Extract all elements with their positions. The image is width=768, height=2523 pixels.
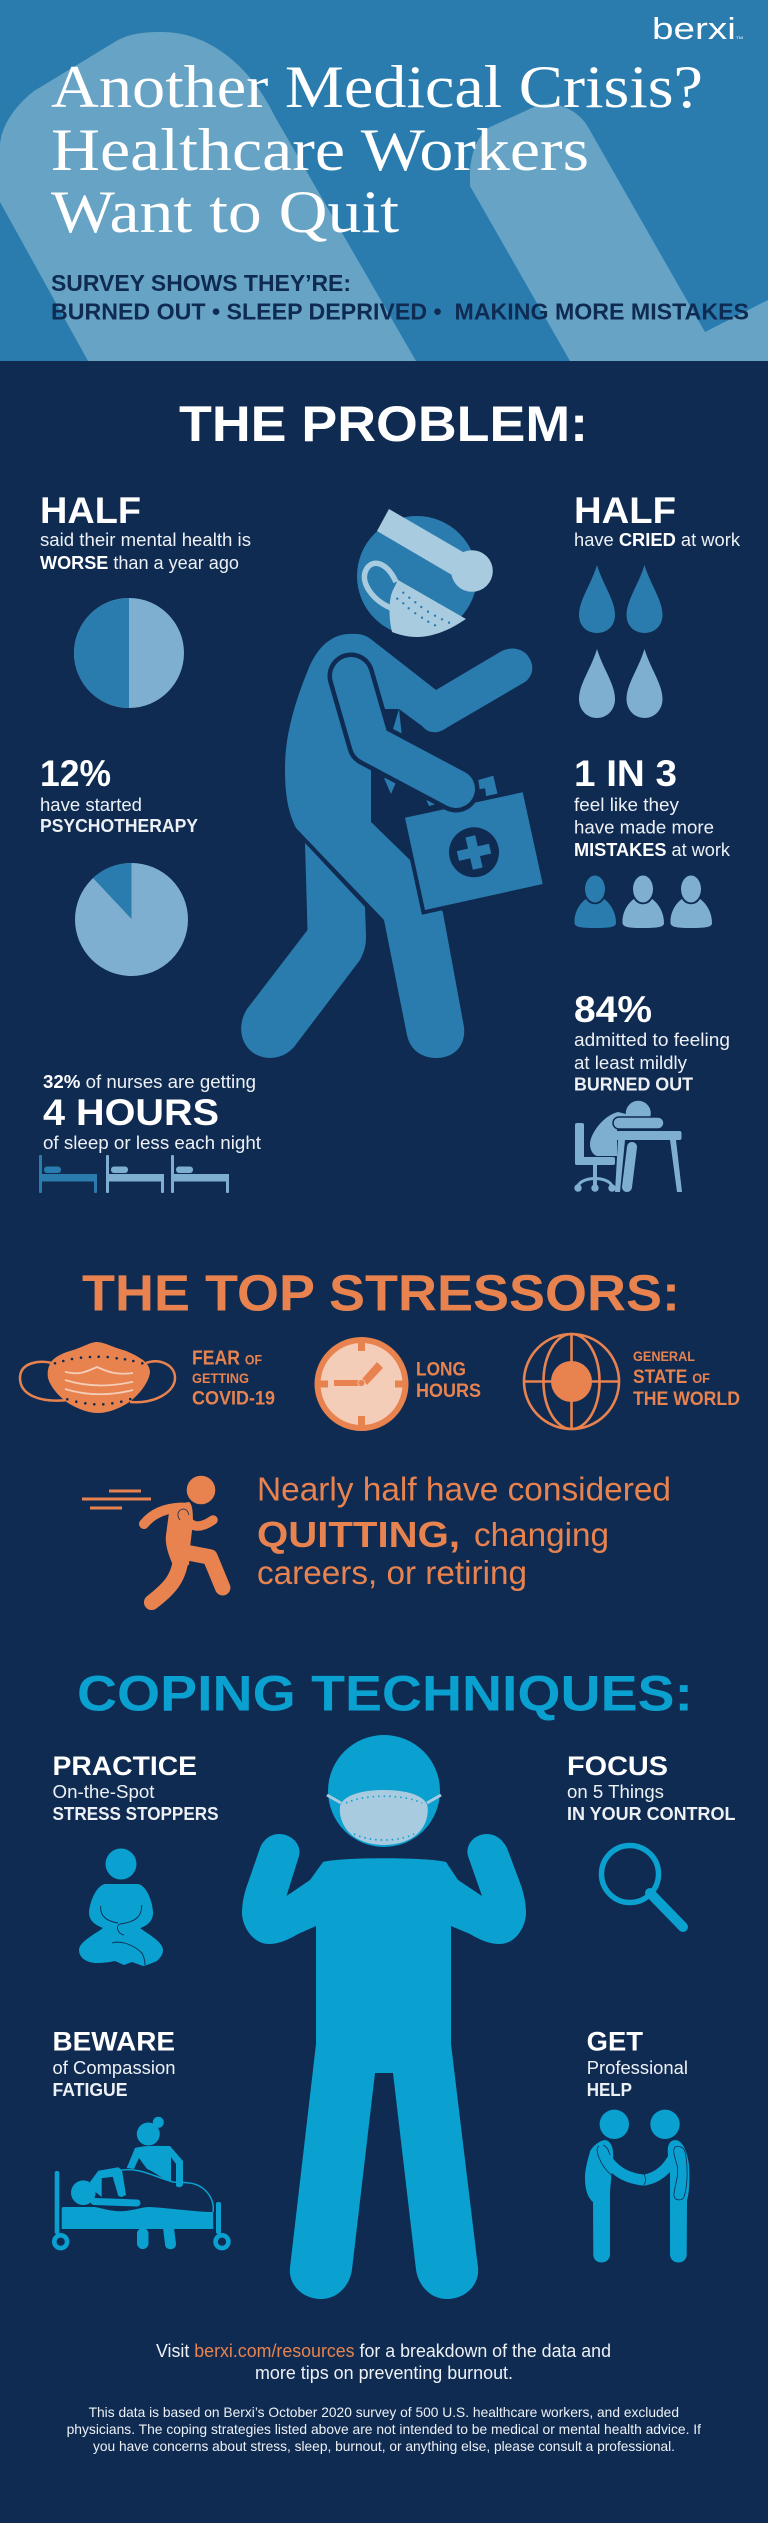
pie chart: 12% <box>75 863 188 976</box>
technique: practice stress stoppers: STRESS STOPPERS <box>52 1803 218 1824</box>
technique: practice stress stoppers <box>52 1751 218 1824</box>
stat: 12% psychotherapy: 12% <box>40 753 111 794</box>
stat: 32% of nurses 4 hours: 32% of nurses are getting <box>43 1071 256 1092</box>
stat: 12% psychotherapy: PSYCHOTHERAPY <box>40 815 199 836</box>
front arm <box>351 676 456 789</box>
title: Healthcare Workers <box>51 117 589 183</box>
icon: nurse with patient in bed <box>54 2117 228 2249</box>
technique: beware of compassion fatigue <box>52 2026 176 2100</box>
panel: header banner <box>0 0 768 361</box>
logo: berxi: berxi <box>652 11 719 46</box>
technique: get professional help <box>587 2026 688 2100</box>
stat: half mental health worse: HALF <box>40 490 141 531</box>
label: LONG <box>416 1358 466 1380</box>
stat: 1 in 3 mistakes <box>574 753 731 860</box>
label: COVID-19 <box>192 1388 275 1410</box>
stressor: long hours <box>318 1340 481 1428</box>
heading: the top stressors: THE TOP STRESSORS: <box>82 1264 680 1322</box>
icon: three people <box>574 876 712 928</box>
stat: 84% burned out <box>574 989 730 1094</box>
stat: half mental health worse <box>40 490 251 573</box>
technique: practice stress stoppers: PRACTICE <box>52 1751 197 1781</box>
technique: beware of compassion fatigue: of Compassion <box>52 2057 176 2078</box>
heading: coping techniques: COPING TECHNIQUES: <box>77 1666 693 1722</box>
head with headband and mask <box>357 509 493 637</box>
illustration: burned out doctor with medical bag <box>241 509 543 1058</box>
icon: beds <box>39 1155 229 1193</box>
stat: 1 in 3 mistakes: feel like they <box>574 794 680 815</box>
stat: 12% psychotherapy <box>40 753 199 836</box>
stat: 84% burned out: at least mildly <box>574 1052 688 1073</box>
text block: call to visit resources: more tips on preventing burnout. <box>255 2363 513 2383</box>
stat: half have cried <box>574 490 741 550</box>
technique: beware of compassion fatigue: BEWARE <box>52 2026 175 2056</box>
stat: 84% burned out: BURNED OUT <box>574 1074 694 1094</box>
technique: practice stress stoppers: On-the-Spot <box>52 1781 154 1802</box>
subtitle <box>51 270 749 324</box>
stat: half mental health worse: said their mental health is <box>40 529 251 550</box>
label: HOURS <box>416 1380 481 1402</box>
technique: focus on what you control: FOCUS <box>567 1751 668 1781</box>
technique: focus on what you control: IN YOUR CONTROL <box>567 1803 736 1824</box>
technique: beware of compassion fatigue: FATIGUE <box>52 2079 128 2100</box>
title: Want to Quit <box>51 179 399 245</box>
stressor: general state of the world <box>524 1334 740 1429</box>
technique: get professional help: HELP <box>587 2079 632 2100</box>
text block: disclaimer <box>67 2405 701 2454</box>
heading: the problem: THE PROBLEM: <box>179 396 588 452</box>
stat: 32% of nurses 4 hours: 4 HOURS <box>43 1092 219 1133</box>
callout: quitting <box>257 1470 671 1591</box>
text block: call to visit resources: Visit berxi.com/resources for a breakdown of the data and <box>156 2341 611 2361</box>
torso and front leg <box>285 634 464 1058</box>
callout: quitting: careers, or retiring <box>257 1554 527 1591</box>
stat: half mental health worse: WORSE than a year ago <box>40 552 239 573</box>
illustration: masked healthcare worker flexing <box>242 1735 526 2299</box>
stat: 1 in 3 mistakes: 1 IN 3 <box>574 753 677 794</box>
back leg <box>241 843 366 1058</box>
icon: face mask <box>20 1342 175 1413</box>
technique: focus on what you control <box>567 1751 736 1824</box>
label: FEAR OF <box>192 1348 262 1370</box>
text block: disclaimer: This data is based on Berxi’s October 2020 survey of 500 U.S. healthcare workers, and excluded <box>89 2405 679 2420</box>
stressor: fear of covid <box>20 1342 275 1413</box>
label: STATE OF <box>633 1367 710 1388</box>
icon: clock <box>318 1340 406 1428</box>
logo: berxi: TM <box>736 35 743 40</box>
stat: half have cried: HALF <box>574 490 676 531</box>
label: GENERAL <box>633 1349 695 1364</box>
label: THE WORLD <box>633 1389 740 1410</box>
icon: two people shaking hands <box>585 2110 689 2262</box>
title: Another Medical Crisis? <box>51 54 703 120</box>
label <box>416 1358 481 1402</box>
icon: globe <box>524 1334 619 1429</box>
stat: half have cried: have CRIED at work <box>574 529 741 550</box>
subtitle: SURVEY SHOWS THEY’RE: <box>51 270 351 296</box>
stat: 32% of nurses 4 hours <box>43 1071 261 1153</box>
icon: magnifying glass <box>602 1846 683 1927</box>
stat: 84% burned out: admitted to feeling <box>574 1029 730 1050</box>
callout: quitting: Nearly half have considered <box>257 1470 671 1508</box>
icon: meditating person <box>79 1848 163 1966</box>
rear arm <box>340 634 532 732</box>
icon: exhausted worker at desk <box>574 1101 682 1192</box>
label: GETTING <box>192 1370 249 1386</box>
stat: 1 in 3 mistakes: have made more <box>574 816 714 838</box>
tie <box>384 709 402 794</box>
text block: call to visit resources <box>156 2341 611 2383</box>
callout: quitting: QUITTING, <box>257 1514 460 1555</box>
technique: get professional help: Professional <box>587 2057 688 2078</box>
stat: 1 in 3 mistakes: MISTAKES at work <box>574 839 731 860</box>
callout: quitting: changing <box>474 1516 609 1553</box>
icon: running figure <box>82 1476 223 1602</box>
text block: disclaimer: physicians. The coping strategies listed above are not intended to be medical or mental health advice. If <box>67 2422 701 2437</box>
label <box>192 1348 275 1410</box>
subtitle: BURNED OUT • SLEEP DEPRIVED • MAKING MORE MISTAKES <box>51 298 749 324</box>
title <box>51 54 703 245</box>
icon: tear drops <box>579 565 662 718</box>
technique: focus on what you control: on 5 Things <box>567 1781 664 1802</box>
stat: 84% burned out: 84% <box>574 989 652 1030</box>
pie chart: half <box>74 598 184 708</box>
medical bag <box>405 776 543 910</box>
technique: get professional help: GET <box>587 2026 644 2056</box>
stat: 32% of nurses 4 hours: of sleep or less each night <box>43 1132 261 1153</box>
text block: disclaimer: you have concerns about stress, sleep, burnout, or anything else, please consult a professional. <box>93 2439 675 2454</box>
stat: 12% psychotherapy: have started <box>40 794 142 815</box>
label <box>633 1349 740 1410</box>
